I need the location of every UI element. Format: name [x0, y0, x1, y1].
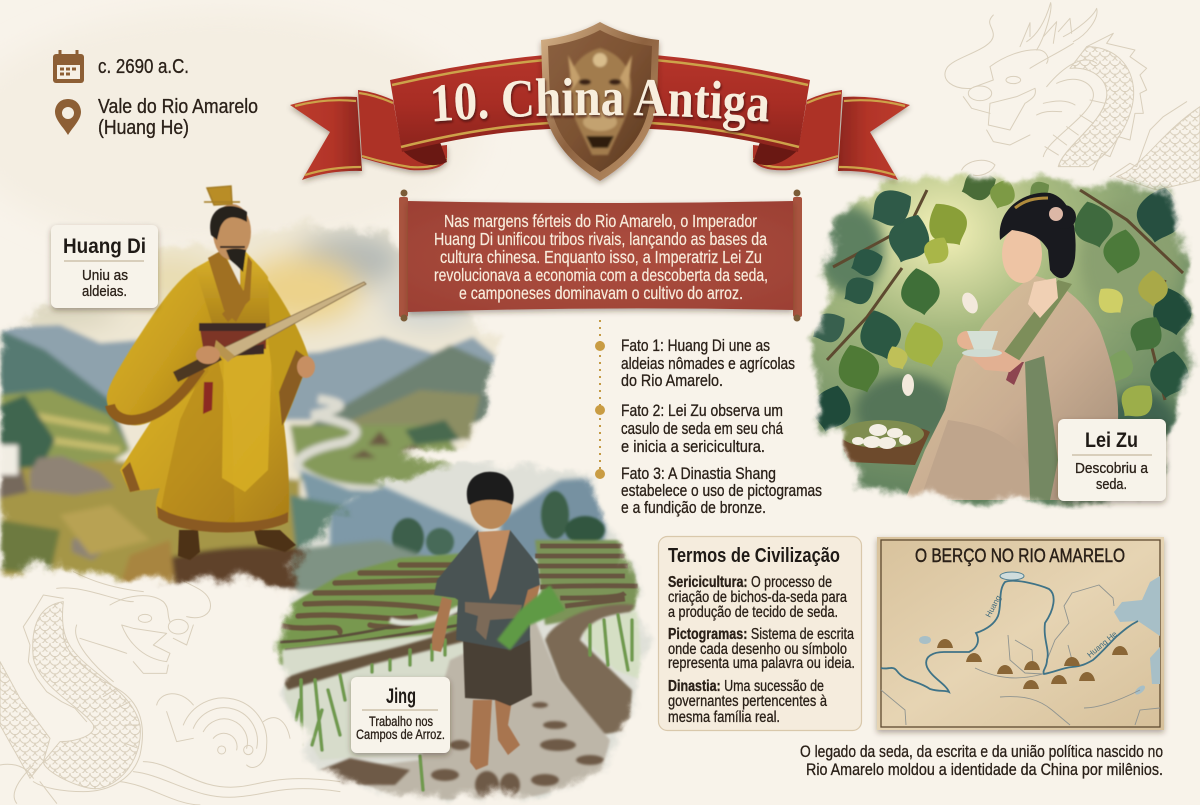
ribbon tail left	[290, 90, 447, 180]
panel: Jing rice terraces painting	[270, 460, 660, 805]
label card: Huang Di: Uniu as	[82, 267, 128, 284]
green sash bands	[1004, 280, 1072, 500]
term: Dinastia: governantes pertencentes à	[668, 693, 827, 710]
icon: calendar	[53, 50, 84, 83]
terraces right	[535, 540, 640, 625]
fact 3	[621, 465, 822, 517]
fact 3: Fato 3: A Dinastia Shang	[621, 465, 776, 483]
fact 1: aldeias nômades e agrícolas	[621, 355, 795, 373]
location with pin icon: Vale do Rio Amarelo	[98, 96, 258, 118]
decorative dragon top right	[945, 3, 1200, 190]
ribbon tail right	[753, 90, 910, 180]
basket of cocoons	[835, 420, 930, 465]
term: Sericicultura: a produção de tecido de seda.	[668, 604, 838, 621]
illustration: Jing boy	[432, 472, 565, 770]
term: Dinastia	[668, 678, 827, 726]
term: Dinastia: mesma família real.	[668, 709, 780, 726]
dragon face	[568, 48, 632, 155]
panel: Termos de Civilização	[658, 536, 862, 730]
label card: Huang Di: aldeias.	[82, 283, 127, 300]
fact 1: do Rio Amarelo.	[621, 372, 723, 390]
label card: Lei Zu	[1058, 419, 1166, 501]
river labels	[984, 594, 1119, 660]
head	[467, 472, 514, 529]
term: Pictogramas: Pictogramas: Sistema de escrita	[668, 626, 854, 643]
label card: Jing: Trabalho nos	[369, 714, 433, 729]
tributaries	[881, 585, 1160, 725]
scroll text: revolucionava a economia com a descoberta da seda,	[434, 265, 768, 285]
fact 3: estabelece o uso de pictogramas	[621, 482, 822, 500]
fact 1	[621, 337, 795, 390]
terraces left	[272, 552, 480, 665]
location with pin icon	[55, 96, 258, 139]
date with calendar icon: c. 2690 a.C.	[98, 56, 189, 78]
arms	[432, 585, 540, 652]
label card: Huang Di	[51, 225, 158, 308]
term: Sericicultura: Sericicultura: O processo de	[668, 574, 832, 591]
term: Dinastia: Dinastia: Uma sucessão de	[668, 678, 824, 695]
timeline of facts	[595, 320, 822, 517]
fact 2	[621, 402, 784, 456]
left sleeve	[107, 268, 214, 425]
shorts	[463, 635, 532, 706]
scroll text: Huang Di unificou tribos rivais, lançando as bases da	[434, 229, 767, 249]
sword	[173, 282, 366, 382]
village	[350, 431, 426, 458]
fact 1: Fato 1: Huang Di une as	[621, 337, 770, 355]
scroll text: cultura chinesa. Enquanto isso, a Imperatriz Lei Zu	[440, 247, 762, 267]
fact 3: e a fundição de bronze.	[621, 499, 766, 517]
hands and cup	[957, 331, 1022, 372]
date with calendar icon	[53, 50, 189, 83]
rocks and hilltop ground	[30, 456, 115, 495]
icon: map pin	[55, 99, 81, 135]
main ribbon with folds	[390, 55, 810, 165]
fact 2: e inicia a sericicultura.	[621, 438, 765, 456]
title: 10. China Antiga	[432, 78, 770, 134]
fact 2: Fato 2: Lei Zu observa um	[621, 402, 783, 420]
boots	[178, 530, 296, 560]
term: Pictogramas	[668, 626, 855, 672]
rice bundle	[497, 585, 565, 650]
location with pin icon: (Huang He)	[98, 117, 189, 139]
label card: Lei Zu: seda.	[1096, 476, 1127, 493]
label card: Lei Zu: Descobriu a	[1075, 460, 1149, 477]
robe shadow side	[160, 345, 235, 530]
map: O berço no Rio Amarelo	[877, 537, 1164, 730]
term: Pictogramas: representa uma palavra ou ideia.	[668, 655, 855, 672]
Yellow River	[881, 581, 1138, 692]
settlements	[937, 639, 1128, 689]
dim foliage	[821, 201, 1180, 446]
mid hills	[0, 330, 130, 448]
rice shoots	[296, 615, 632, 790]
term: Sericicultura	[668, 574, 847, 621]
distant trees	[392, 491, 605, 558]
torso	[192, 250, 270, 330]
scroll text	[434, 211, 768, 303]
hands	[196, 346, 315, 378]
sea and lakes	[919, 572, 1160, 696]
fact 2: casulo de seda em seu chá	[621, 420, 784, 438]
scroll text: Nas margens férteis do Rio Amarelo, o Imperador	[444, 211, 757, 231]
sash	[465, 602, 522, 640]
mud banks	[282, 625, 470, 690]
river labels: Huang He	[1086, 629, 1119, 660]
terraces and valley fields	[0, 390, 130, 470]
crown	[204, 186, 240, 205]
illustration: Huang Di figure	[107, 186, 366, 560]
collar	[208, 250, 252, 322]
intro scroll banner	[399, 190, 802, 322]
tassel	[203, 382, 213, 414]
term: Pictogramas: onde cada desenho ou símbolo	[668, 641, 847, 658]
closing statement	[800, 742, 1163, 779]
leaves	[813, 173, 1192, 432]
panel: Huang Di landscape painting	[0, 218, 502, 593]
far mountains	[0, 325, 500, 420]
label card: Lei Zu: Lei Zu	[1085, 429, 1138, 452]
hem band	[157, 506, 288, 532]
floating cocoons	[902, 290, 981, 396]
Lei Zu gown	[905, 275, 1118, 500]
label card: Jing: Campos de Arroz.	[356, 727, 445, 742]
legs	[470, 700, 520, 770]
head	[210, 204, 251, 272]
robe skirt	[120, 325, 289, 532]
flooded paddy	[282, 630, 470, 760]
branches	[827, 190, 1183, 400]
wet path	[364, 622, 610, 801]
river labels: Huang	[984, 594, 1003, 619]
label card: Jing	[351, 677, 450, 753]
right sleeve	[262, 272, 310, 428]
chest	[478, 530, 510, 600]
blue mountains	[330, 478, 608, 570]
belt	[199, 323, 266, 349]
shirt	[434, 530, 540, 650]
term: Sericicultura: criação de bichos-da-seda para	[668, 589, 847, 606]
label card: Huang Di: Huang Di	[63, 235, 146, 258]
map title: O BERÇO NO RIO AMARELO	[915, 546, 1125, 567]
dragon shield	[541, 22, 659, 181]
river	[297, 399, 380, 490]
clouds	[0, 232, 475, 328]
scroll text: e camponeses dominavam o cultivo do arroz.	[459, 283, 743, 303]
label card: Jing: Jing	[386, 685, 416, 708]
decorative dragon bottom left	[0, 572, 340, 805]
panel: Lei Zu painting	[800, 165, 1200, 510]
heading: Termos de Civilização	[668, 545, 840, 567]
face and hair	[1000, 193, 1076, 318]
